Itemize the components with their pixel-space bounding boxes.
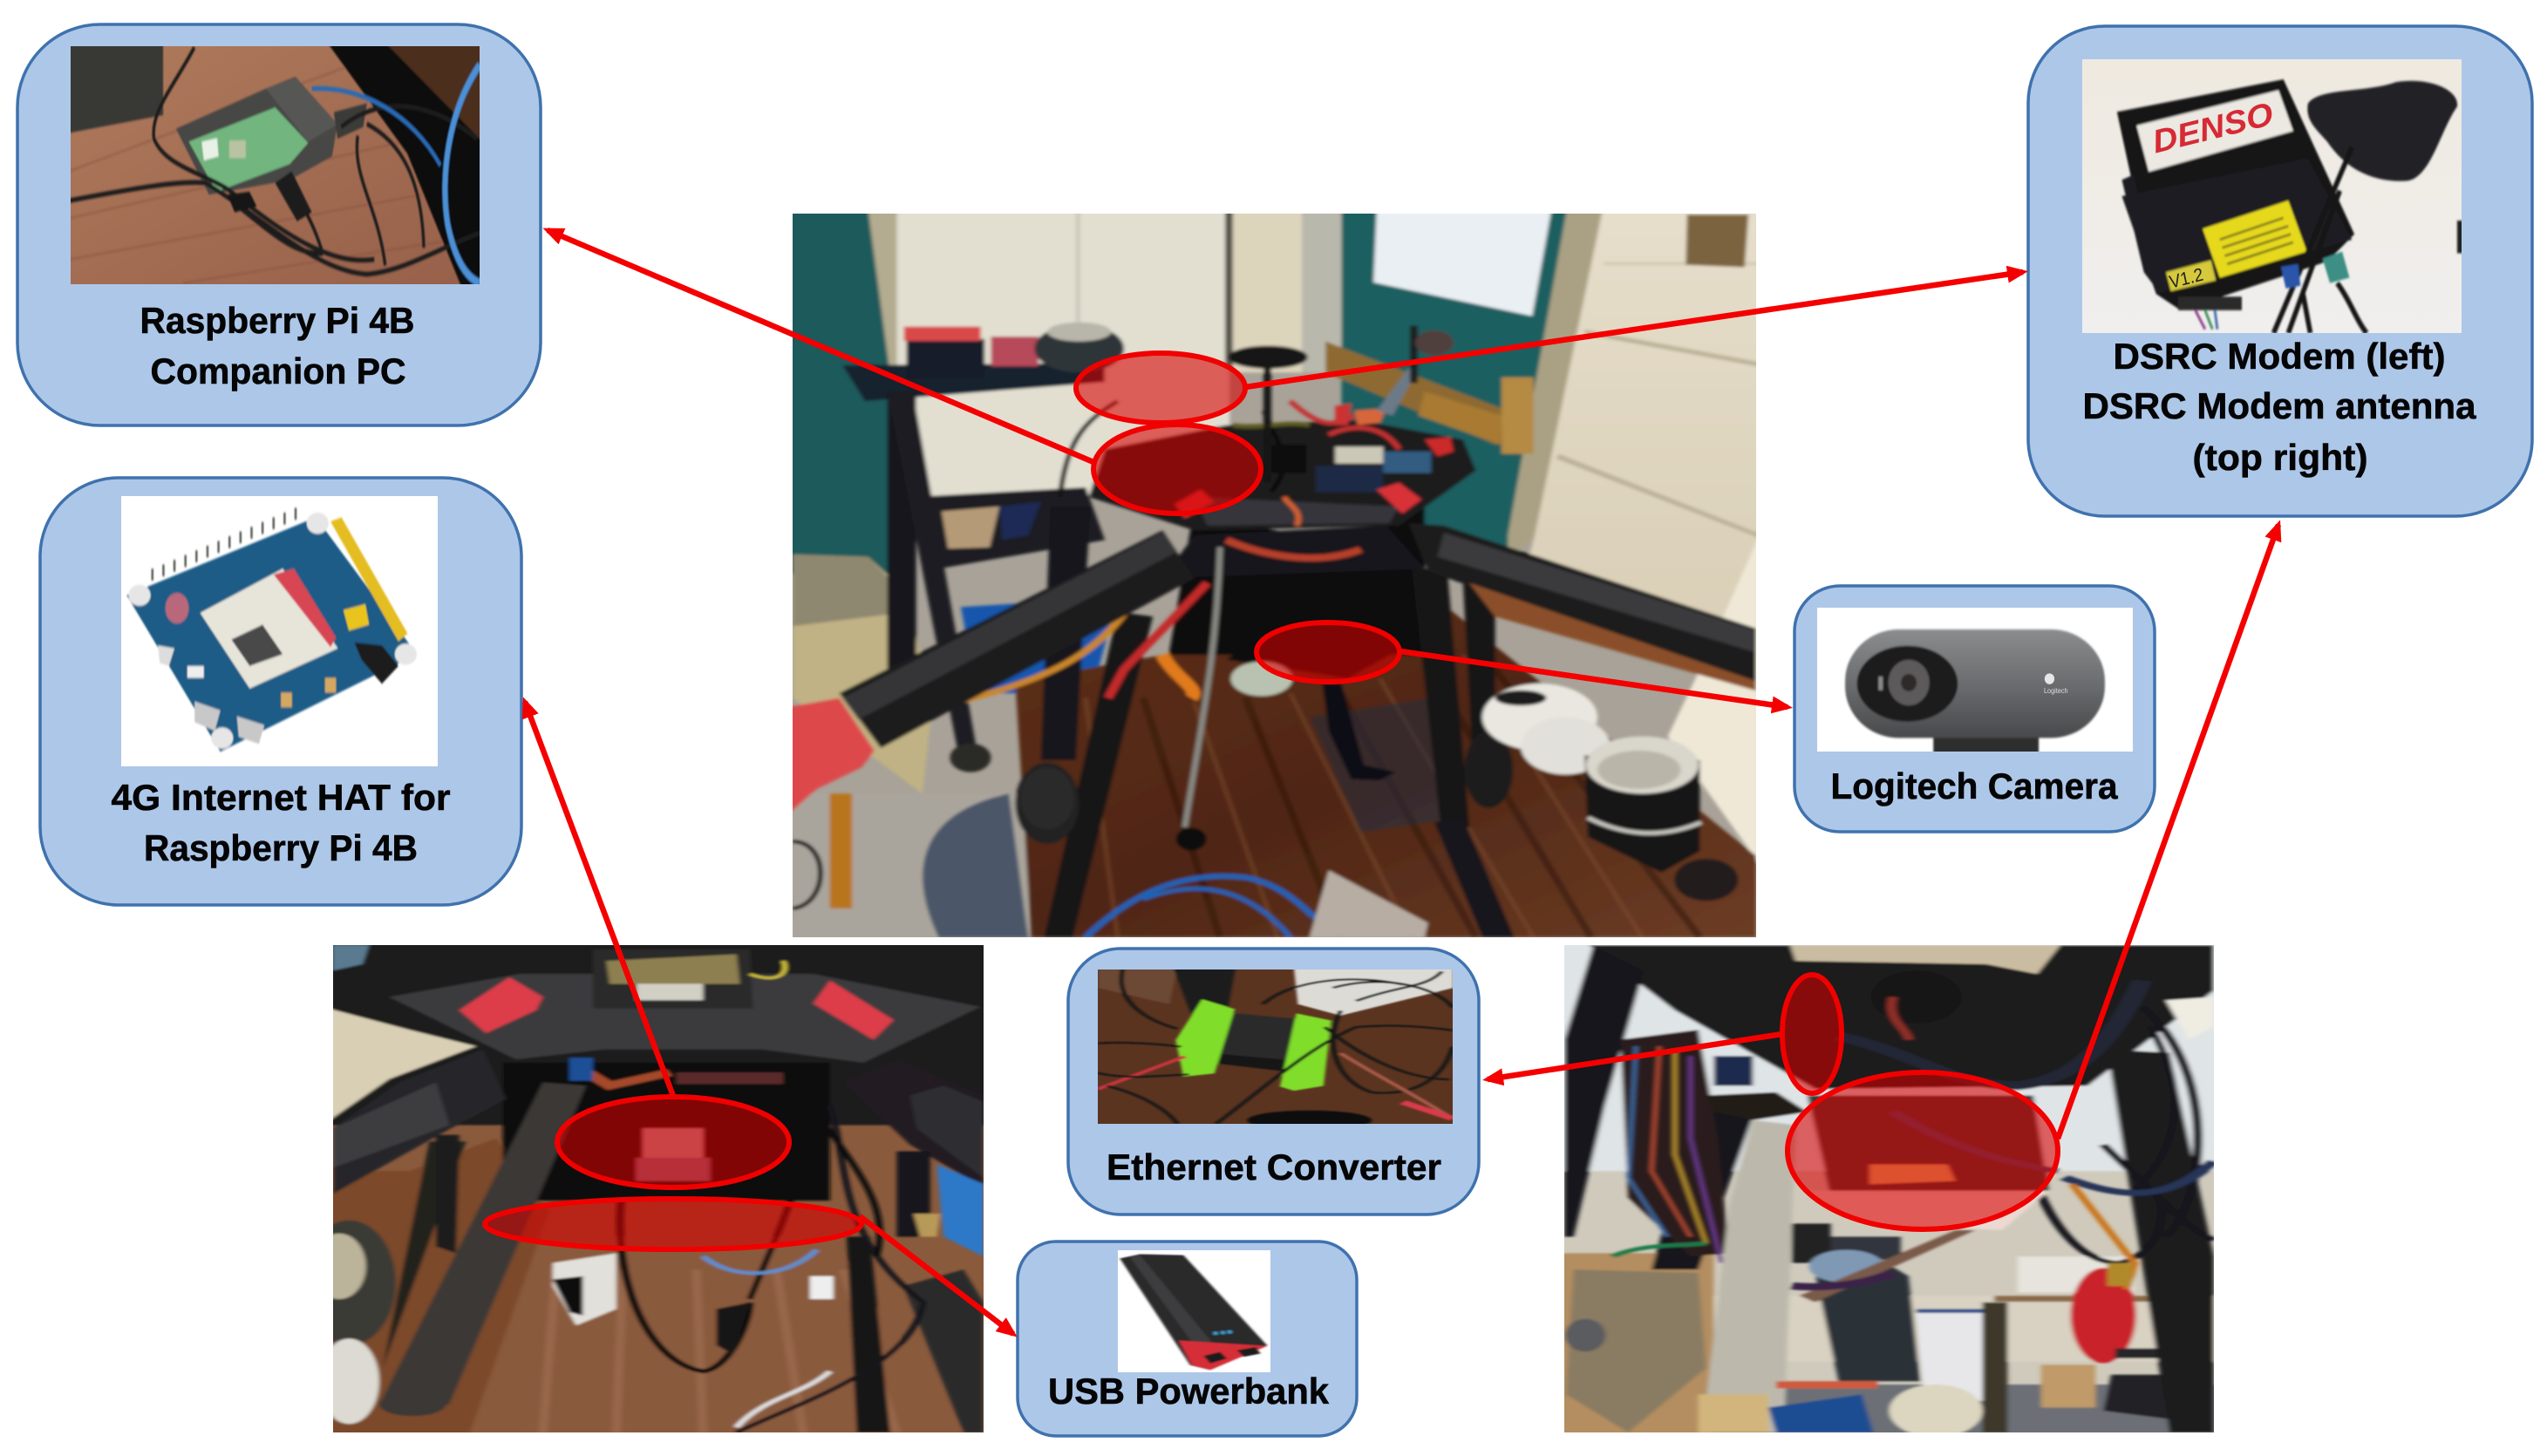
arrow: to DSRC modem panel (modem) (2058, 525, 2278, 1139)
arrow: to 4G HAT panel (525, 702, 673, 1096)
photo: Logitech webcam (1817, 608, 2133, 752)
camera brand text: Logitech (2044, 686, 2068, 695)
jacket (1815, 1253, 1920, 1381)
arms (333, 1050, 506, 1194)
arrow: to Logitech camera panel (1400, 651, 1788, 707)
bottom cable and bag (1086, 876, 1316, 937)
photo: DENSO DSRC modem with antenna (2082, 59, 2462, 333)
modem version text: V1.2 (2168, 265, 2205, 293)
module behind red ellipse (1808, 1096, 2049, 1194)
wire bundle lower left (1566, 1269, 1706, 1432)
panel: DSRC modem and antenna (2028, 26, 2532, 516)
arrow: to Raspberry Pi panel (548, 230, 1093, 462)
label: Raspberry Pi 4B: Raspberry Pi 4B (140, 300, 415, 341)
label: Ethernet Converter: Ethernet Converter (1107, 1146, 1441, 1187)
modem brand text: DENSO (2149, 95, 2277, 160)
highlight ellipses: bottom-left photo (485, 1097, 861, 1249)
panel: Logitech camera (1794, 586, 2155, 832)
photo: drone underside (bottom right) (1564, 945, 2214, 1432)
photo: USB powerbank (1118, 1250, 1270, 1372)
chair (2071, 1268, 2136, 1364)
label: (top right): (top right) (2192, 437, 2368, 478)
panel: Ethernet converter (1068, 949, 1479, 1214)
photo: drone rear view (bottom left) (333, 945, 984, 1432)
highlight ellipses: bottom-right photo (1782, 975, 2058, 1229)
photo: Ethernet converter with green clips (1098, 970, 1453, 1124)
velcro rolls (1482, 684, 1597, 751)
label: Logitech Camera: Logitech Camera (1831, 765, 2118, 806)
photo: 4G HAT circuit board (121, 496, 438, 766)
label: 4G Internet HAT for: 4G Internet HAT for (112, 777, 450, 818)
top plate (1089, 420, 1476, 530)
highlight ellipses: centre photo (1076, 353, 1399, 682)
panel: 4G Internet HAT (40, 478, 521, 905)
arrow: to USB powerbank panel (860, 1216, 1013, 1334)
motor arms (840, 530, 1195, 748)
photo: Raspberry Pi on wooden desk (71, 46, 480, 284)
black cable loops on the right (2033, 1007, 2214, 1263)
panel: Raspberry Pi 4B companion PC (17, 24, 541, 425)
photo: drone overview (centre) (793, 214, 1756, 937)
icon: camera brand mark (2045, 673, 2054, 684)
wiring bundle (1620, 1030, 1729, 1256)
label: USB Powerbank: USB Powerbank (1048, 1371, 1330, 1412)
top underside (1590, 945, 2214, 1089)
ribbon cable (1702, 1120, 1795, 1432)
bottom items (1768, 1394, 1874, 1432)
label: Raspberry Pi 4B: Raspberry Pi 4B (144, 827, 418, 868)
label: DSRC Modem antenna: DSRC Modem antenna (2082, 385, 2476, 426)
arrow: to Ethernet converter panel (1488, 1034, 1782, 1079)
rods and cables (436, 1135, 460, 1253)
panel: USB powerbank (1018, 1242, 1357, 1436)
label: DSRC Modem (left): DSRC Modem (left) (2114, 336, 2445, 377)
long leg (381, 1082, 586, 1414)
label: Companion PC: Companion PC (150, 350, 406, 391)
arrow: to DSRC modem panel (antenna) (1245, 272, 2023, 387)
legs (1564, 946, 1644, 1236)
red mount (785, 698, 875, 818)
